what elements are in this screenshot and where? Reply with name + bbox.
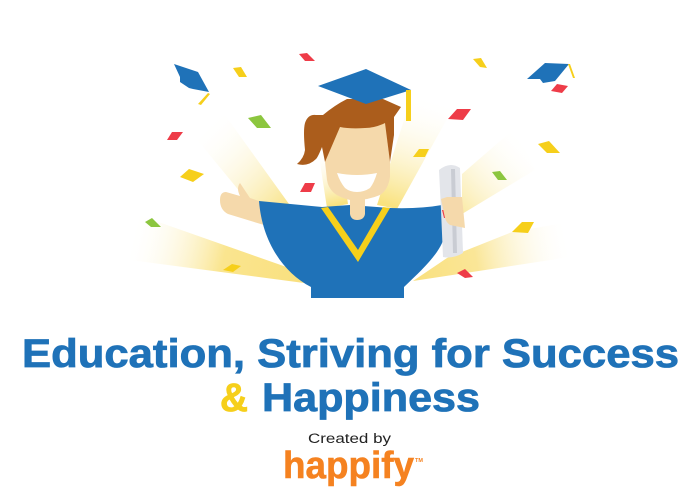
- light rays: [130, 85, 570, 283]
- confetti: [145, 53, 568, 278]
- title: [22, 332, 679, 420]
- gown: [259, 201, 445, 298]
- neck: [350, 190, 365, 220]
- mortarboard: [318, 69, 411, 104]
- icon: small graduation cap right: [527, 63, 575, 83]
- smile: [337, 173, 377, 192]
- hair: [297, 99, 401, 165]
- happify logo: TM: [415, 458, 423, 464]
- diploma scroll: [439, 165, 463, 258]
- right hand: [441, 197, 465, 228]
- created by label: Created by: [308, 431, 391, 446]
- face: [325, 120, 390, 200]
- left hand: [220, 183, 264, 225]
- title: &: [220, 376, 248, 420]
- graduate figure: [220, 69, 465, 298]
- title: Education, Striving for Success: [22, 332, 679, 376]
- tassel: [406, 90, 411, 121]
- title: Happiness: [262, 376, 480, 420]
- icon: small graduation cap left: [174, 64, 210, 105]
- yellow collar: [321, 207, 390, 262]
- happify logo: happify: [283, 445, 414, 487]
- red ribbon: [442, 210, 447, 218]
